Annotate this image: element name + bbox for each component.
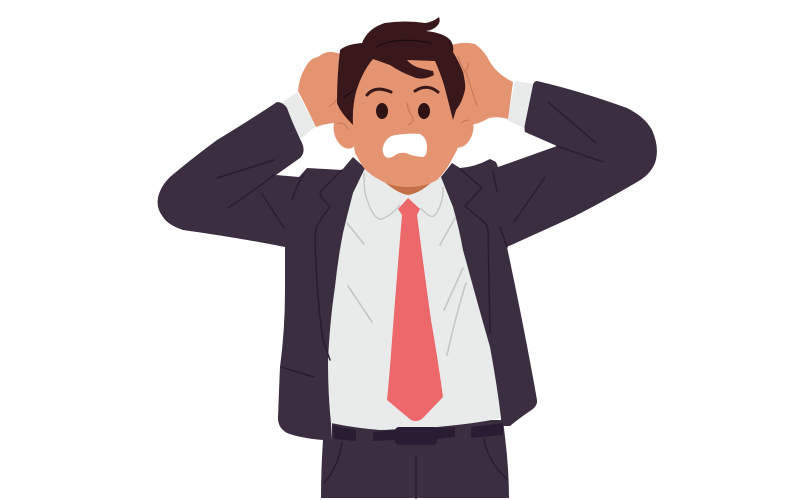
left hand (298, 52, 348, 127)
ears (330, 110, 477, 151)
belt (332, 423, 503, 445)
right sleeve wrinkles (493, 102, 603, 222)
right hand (452, 43, 513, 125)
face (351, 45, 462, 187)
left lapel (315, 170, 342, 360)
shirt (328, 168, 501, 430)
right cuff (507, 81, 535, 129)
nose (407, 103, 413, 125)
neck shadow (378, 176, 438, 195)
right lapel (460, 169, 507, 333)
left sleeve wrinkles (217, 160, 304, 228)
shirt wrinkles (347, 218, 466, 355)
left pocket line (281, 367, 314, 377)
trousers (321, 420, 509, 498)
hair (337, 17, 465, 125)
left cuff (280, 92, 316, 139)
eyes (376, 103, 430, 119)
eyebrows (367, 87, 438, 95)
left jacket and sleeve (158, 102, 365, 440)
right jacket and sleeve (441, 81, 657, 426)
shirt collar (364, 173, 443, 219)
tie (387, 198, 443, 421)
mouth (383, 134, 427, 158)
